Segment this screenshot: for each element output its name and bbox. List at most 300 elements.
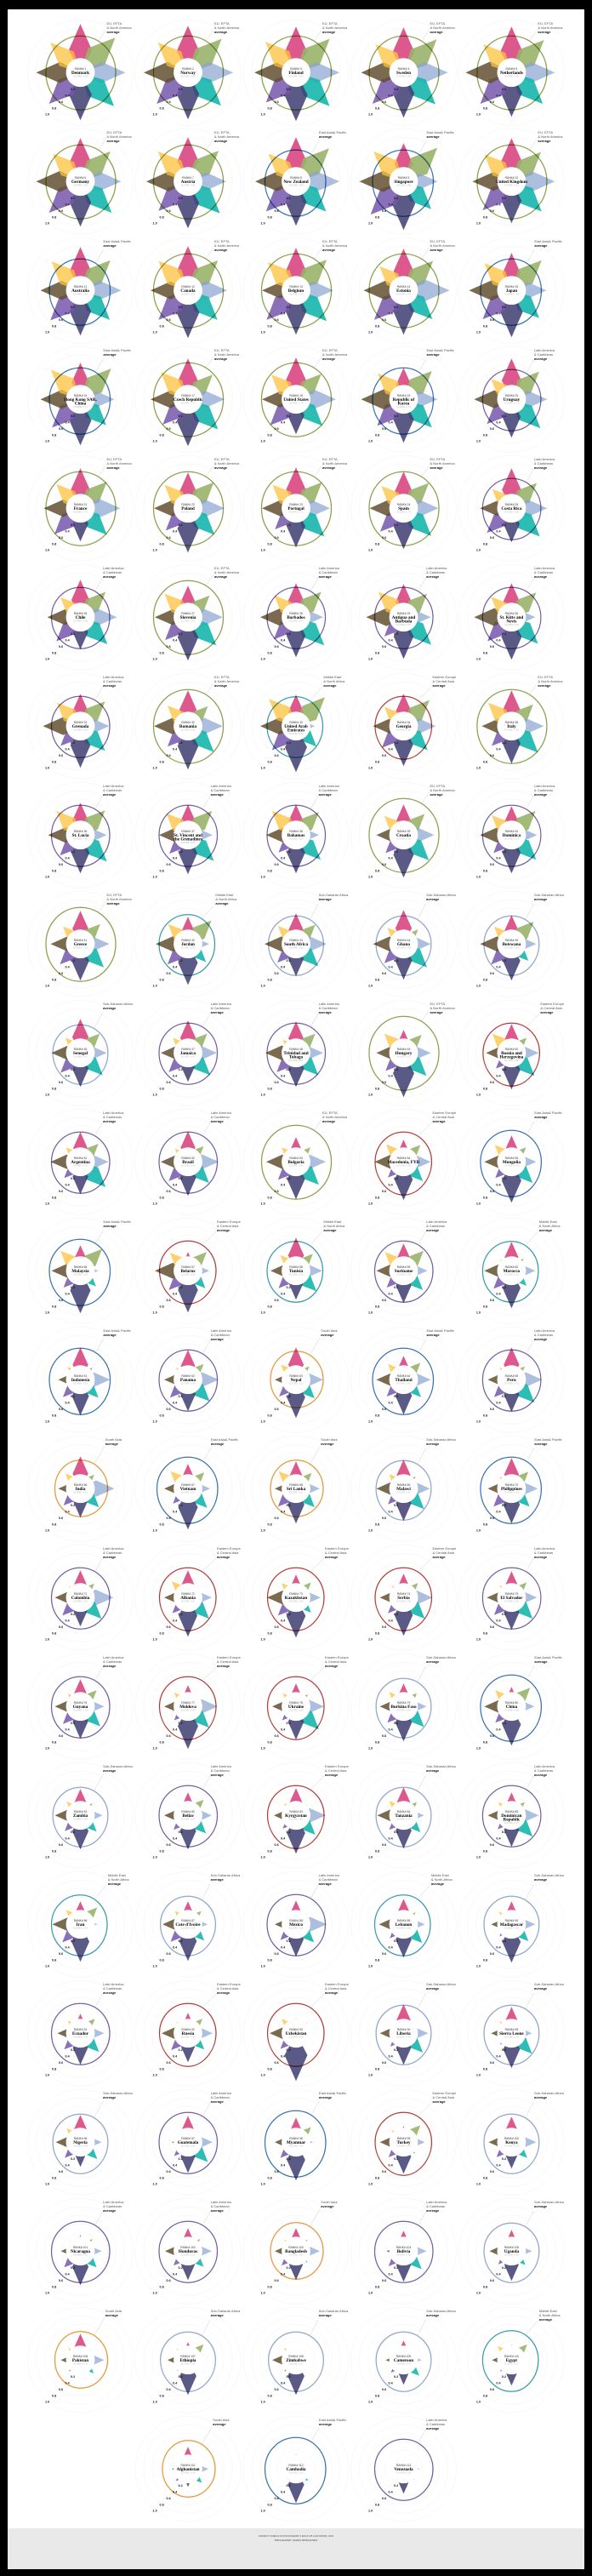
panel: South Africa — [243, 891, 349, 997]
region note: & North America — [538, 134, 563, 139]
ring — [477, 139, 547, 219]
ring — [267, 1014, 325, 1084]
ring — [376, 2320, 431, 2391]
rank: Hungary — [396, 1051, 413, 1056]
petals — [275, 1347, 323, 1418]
panel: Georgia — [350, 673, 457, 779]
petals — [378, 1787, 424, 1848]
petals — [266, 804, 327, 873]
panel: Ecuador — [27, 1980, 133, 2086]
petals — [474, 583, 544, 660]
petals — [373, 910, 433, 980]
rank: RANK# 86 — [74, 1919, 87, 1922]
rank: SCORE: 0.60 — [181, 946, 196, 950]
region note: Sub-Saharan Africa — [426, 2309, 457, 2313]
region note: East Asia& Pacific — [104, 348, 131, 352]
petals — [486, 1024, 540, 1089]
region note: average — [325, 1773, 339, 1777]
region note: EU, EFTA — [107, 457, 122, 461]
region note: average — [534, 466, 548, 470]
rank: Herzegovina — [499, 1054, 524, 1060]
petals — [376, 1356, 430, 1414]
region note: Sub-Saharan Africa — [103, 2091, 134, 2095]
ring — [161, 2320, 215, 2391]
rank: SCORE: 0.45 — [289, 2036, 304, 2039]
rank: Pakistan — [72, 2358, 88, 2363]
petals — [274, 1461, 320, 1523]
petals — [272, 1683, 324, 1739]
panel: Spain — [350, 455, 456, 561]
region note: average — [214, 466, 228, 470]
rank: SCORE: 0.51 — [181, 1491, 196, 1494]
panel: United Kingdom — [458, 129, 564, 234]
rank: RANK# 32 — [181, 721, 195, 724]
region note: & North America — [107, 134, 132, 139]
panel: Ghana — [350, 891, 457, 997]
region note: EU, EFTA — [430, 1002, 446, 1006]
petals — [386, 2340, 423, 2385]
region note: & North America — [322, 461, 348, 466]
rank: RANK# 23 — [289, 503, 303, 506]
ring — [265, 2428, 326, 2504]
region note: average — [214, 683, 228, 688]
rank: SCORE: 0.58 — [504, 946, 519, 950]
panel: Portugal — [243, 455, 349, 561]
rank: Panama — [180, 1378, 196, 1383]
ring — [265, 140, 326, 216]
petals — [376, 1029, 432, 1097]
region note: average — [432, 1555, 446, 1559]
petals — [51, 1132, 111, 1194]
region note: East Asia& Pacific — [427, 130, 454, 134]
region note: average — [539, 2317, 553, 2322]
region note: average — [430, 248, 443, 252]
rank: Kazakhstan — [285, 1596, 307, 1601]
region note: & Central Asia — [217, 1224, 239, 1228]
panel: Greece — [27, 891, 133, 997]
rank: RANK# 77 — [181, 1701, 195, 1705]
ring — [376, 1448, 431, 1520]
rank: SCORE: 0.56 — [504, 1059, 519, 1062]
region note: average — [534, 1659, 548, 1664]
region note: South Asia — [105, 2309, 122, 2313]
rank: SCORE: 0.86 — [504, 75, 519, 78]
region note: average — [105, 2313, 119, 2317]
region note: Latin America — [426, 566, 447, 570]
petals — [275, 2228, 320, 2280]
rank: RANK# 102 — [180, 2246, 196, 2249]
region note: average — [319, 2422, 333, 2426]
rank: St. Vincent and — [174, 833, 202, 838]
rank: Zimbabwe — [286, 2358, 307, 2363]
region note: Latin America — [103, 1982, 124, 1986]
rank: Uganda — [504, 2249, 519, 2254]
rank: Egypt — [506, 2358, 517, 2363]
panel: Antigua and Barbuda — [350, 564, 456, 670]
rank: SCORE: 0.66 — [73, 728, 88, 732]
rank: RANK# 112 — [288, 2464, 304, 2467]
region note: average — [211, 1119, 224, 1123]
rank: South Africa — [284, 942, 308, 947]
ring — [482, 578, 541, 648]
rank: SCORE: 0.45 — [181, 2036, 196, 2039]
petals — [164, 1685, 218, 1749]
rank: SCORE: 0.37 — [396, 2362, 411, 2366]
region note: average — [426, 1986, 440, 1991]
panel: Zimbabwe — [243, 2307, 349, 2413]
petals — [275, 1900, 327, 1956]
ring — [46, 901, 116, 981]
petals — [361, 27, 447, 117]
rank: Albania — [180, 1596, 196, 1601]
region note: average — [534, 243, 548, 248]
rank: RANK# 106 — [73, 2355, 88, 2358]
rank: Peru — [507, 1378, 516, 1383]
petals — [154, 690, 223, 769]
region note: East Asia& Pacific — [319, 130, 346, 134]
region note: average — [321, 1333, 334, 1337]
panel: St. Vincent and the Grenadines — [135, 782, 241, 888]
rank: Honduras — [179, 2249, 197, 2254]
petals — [259, 248, 334, 334]
rank: SCORE: 0.46 — [289, 1927, 304, 1930]
panel: Belgium — [243, 237, 349, 343]
rank: RANK# 83 — [289, 1810, 303, 1813]
rank: SCORE: 0.53 — [396, 1273, 411, 1277]
rank: RANK# 39 — [397, 830, 410, 833]
ring — [162, 2427, 215, 2497]
region note: average — [322, 357, 336, 361]
panel: Madagascar — [458, 1871, 564, 1977]
region note: average — [319, 897, 332, 901]
region note: average — [322, 1119, 336, 1123]
petals — [359, 140, 446, 230]
ring — [374, 2212, 433, 2282]
panel: Senegal — [27, 1000, 134, 1105]
rank: Turkey — [397, 2140, 411, 2145]
ring — [369, 1010, 439, 1090]
rank: RANK# 26 — [74, 612, 87, 615]
rank: RANK# 17 — [181, 394, 195, 397]
region note: average — [211, 2099, 224, 2104]
region note: EU, EFTA — [538, 130, 553, 134]
region note: & North Africa — [215, 897, 237, 901]
rank: RANK# 63 — [289, 1374, 303, 1378]
ring — [482, 1231, 538, 1302]
rank: RANK# 3 — [290, 67, 302, 71]
region note: EU, EFTA — [538, 675, 553, 679]
panel: Botswana — [458, 891, 564, 997]
rank: Tunisia — [289, 1269, 304, 1274]
rank: RANK# 96 — [74, 2137, 87, 2140]
panel: Italy — [458, 673, 564, 779]
region note: average — [103, 1768, 117, 1773]
region note: & Caribbean — [211, 1333, 230, 1337]
rank: RANK# 44 — [397, 939, 410, 942]
region note: Latin America — [211, 1764, 232, 1768]
panel: Nicaragua — [27, 2198, 133, 2304]
rank: Greece — [74, 942, 88, 947]
region note: & Caribbean — [319, 1006, 338, 1010]
region note: EU, EFTA — [214, 566, 230, 570]
region note: average — [430, 466, 443, 470]
region note: Latin America — [211, 1328, 232, 1333]
petals — [162, 2013, 213, 2062]
rank: Malaysia — [71, 1269, 89, 1274]
ring — [262, 357, 332, 437]
region note: average — [107, 139, 120, 143]
region note: average — [432, 1119, 446, 1123]
rank: SCORE: 0.66 — [504, 623, 519, 626]
region note: average — [534, 1115, 548, 1119]
region note: Latin America — [211, 1111, 232, 1115]
rank: Colombia — [71, 1596, 90, 1601]
ring — [267, 1667, 324, 1739]
panel: Macedonia, FYR — [350, 1109, 457, 1214]
panel: Panama — [135, 1327, 241, 1432]
panel: Serbia — [350, 1545, 457, 1650]
rank: RANK# 104 — [396, 2246, 411, 2249]
ring — [54, 1447, 107, 1516]
rank: Spain — [398, 506, 409, 511]
rank: SCORE: 0.67 — [181, 620, 196, 623]
rank: Barbados — [287, 615, 305, 620]
panel: Nepal — [243, 1327, 349, 1432]
region note: & Central Asia — [432, 679, 455, 683]
region note: & Caribbean — [211, 2095, 230, 2099]
region note: Sub-Saharan Africa — [319, 2309, 349, 2313]
rank: RANK# 13 — [289, 285, 303, 288]
ring — [153, 139, 223, 219]
region note: Middle East — [215, 893, 234, 897]
region note: average — [426, 2426, 440, 2430]
region note: average — [534, 2095, 548, 2099]
panel: Morocco — [458, 1218, 564, 1323]
petals — [376, 1243, 428, 1303]
region note: East Asia& Pacific — [319, 2091, 346, 2095]
rank: SCORE: 0.83 — [73, 184, 88, 187]
ring — [262, 1119, 332, 1199]
panel: Suriname — [350, 1218, 456, 1323]
region note: & Caribbean — [319, 570, 338, 574]
panel: Hong Kong SAR, China — [27, 346, 133, 452]
region note: & North Africa — [539, 1224, 561, 1228]
rank: RANK# 64 — [397, 1374, 410, 1378]
rank: Emirates — [287, 728, 305, 733]
rank: Czech Republic — [174, 397, 203, 403]
rank: SCORE: 0.52 — [73, 1382, 88, 1385]
ring — [373, 358, 434, 434]
panel: New Zealand — [243, 129, 349, 234]
region note: average — [322, 466, 336, 470]
region note: average — [103, 2208, 117, 2213]
panel: Guatemala — [135, 2089, 241, 2195]
region note: average — [540, 1010, 554, 1014]
ring — [376, 904, 431, 975]
panel: United Arab Emirates — [243, 673, 349, 779]
region note: average — [217, 1664, 231, 1668]
ring — [374, 2430, 433, 2500]
region note: & North America — [214, 679, 240, 683]
region note: average — [325, 1991, 339, 1995]
region note: average — [211, 2208, 224, 2213]
rank: SCORE: 0.58 — [396, 946, 411, 950]
ring — [477, 683, 547, 763]
rank: SCORE: 0.54 — [504, 1164, 519, 1168]
region note: average — [217, 1991, 231, 1995]
region note: East Asia& Pacific — [104, 1328, 131, 1333]
ring — [267, 1885, 325, 1956]
region note: EU, EFTA — [430, 784, 446, 788]
rank: RANK# 89 — [397, 1919, 410, 1922]
region note: Latin America — [319, 566, 340, 570]
region note: average — [534, 357, 548, 361]
ring — [482, 1340, 541, 1411]
panel: Tanzania — [350, 1762, 457, 1868]
panel: Sierra Leone — [458, 1980, 564, 2086]
rank: SCORE: 0.47 — [396, 1818, 411, 1821]
region note: EU, EFTA — [322, 1111, 338, 1115]
ring — [267, 1231, 323, 1302]
region note: Latin America — [103, 1546, 124, 1551]
petals — [58, 1347, 111, 1415]
panel: Nigeria — [27, 2089, 134, 2195]
region note: & Central Asia — [432, 2095, 455, 2099]
region note: average — [534, 2204, 548, 2208]
rank: RANK# 93 — [289, 2028, 303, 2031]
region note: & Caribbean — [103, 1115, 122, 1119]
panel: Albania — [135, 1545, 242, 1650]
ring — [482, 1558, 541, 1629]
rank: SCORE: 0.50 — [396, 1600, 411, 1603]
rank: SCORE: 0.48 — [73, 1818, 88, 1821]
panel: Cambodia — [243, 2416, 349, 2522]
rank: El Salvador — [500, 1596, 523, 1601]
rank: Hong Kong SAR, — [64, 397, 97, 403]
rank: SCORE: 0.50 — [289, 1600, 304, 1603]
petals — [491, 2007, 537, 2068]
ring — [267, 1776, 324, 1848]
ring — [160, 1667, 216, 1739]
ring — [49, 1339, 111, 1414]
ring — [484, 1884, 539, 1956]
ring — [159, 1776, 218, 1847]
rank: Uzbekistan — [286, 2031, 307, 2036]
rank: SCORE: 0.38 — [181, 2362, 196, 2366]
region note: average — [319, 792, 332, 797]
region note: & North America — [430, 26, 455, 30]
panel: Mongolia — [458, 1109, 564, 1214]
ring — [373, 140, 434, 216]
panel: Austria — [135, 129, 241, 234]
panel: Tunisia — [243, 1218, 349, 1323]
petals — [487, 1792, 538, 1847]
rank: RANK# 58 — [289, 1265, 303, 1269]
rank: SCORE: 0.57 — [396, 1055, 411, 1059]
region note: average — [104, 1333, 117, 1337]
region note: average — [217, 1555, 231, 1559]
panel: Guyana — [27, 1654, 133, 1759]
region note: & Caribbean — [534, 788, 553, 792]
rank: Nepal — [291, 1378, 302, 1383]
rank: SCORE: 0.75 — [181, 402, 196, 405]
rank: SCORE: 0.40 — [396, 2253, 411, 2257]
region note: average — [322, 248, 336, 252]
region note: & Caribbean — [426, 1224, 445, 1228]
rank: Kyrgyzstan — [285, 1813, 307, 1819]
panel: Thailand — [350, 1327, 456, 1432]
region note: EU, EFTA — [107, 130, 122, 134]
ring — [482, 2321, 538, 2391]
ring — [262, 30, 332, 110]
rank: SCORE: 0.42 — [181, 2253, 196, 2257]
panel: Grenada — [27, 673, 133, 779]
panel: Uzbekistan — [243, 1980, 350, 2086]
panel: Sweden — [350, 20, 456, 125]
petals — [465, 26, 555, 117]
rank: Georgia — [396, 724, 412, 729]
rank: RANK# 42 — [181, 939, 195, 942]
region note: average — [108, 1882, 122, 1886]
rank: RANK# 87 — [181, 1919, 195, 1922]
rank: SCORE: 0.39 — [504, 2253, 519, 2257]
panel: Colombia — [27, 1545, 133, 1650]
region note: East Asia& Pacific — [104, 1219, 131, 1224]
rank: RANK# 99 — [397, 2137, 410, 2140]
region note: & North America — [430, 243, 455, 248]
rank: RANK# 95 — [505, 2028, 518, 2031]
region note: average — [427, 134, 440, 139]
rank: Bangladesh — [285, 2249, 307, 2254]
panel: Costa Rica — [458, 455, 564, 561]
rank: Ukraine — [288, 1705, 305, 1710]
region note: Middle East — [323, 675, 342, 679]
region note: average — [214, 357, 228, 361]
region note: & Central Asia — [217, 1659, 239, 1664]
rank: RANK# 81 — [74, 1810, 87, 1813]
panel: Burkina Faso — [350, 1654, 457, 1759]
rank: SCORE: 0.65 — [396, 728, 411, 732]
petals — [60, 2235, 102, 2285]
ring — [374, 578, 433, 648]
rank: SCORE: 0.49 — [73, 1709, 88, 1712]
petals — [270, 1237, 322, 1299]
region note: EU, EFTA — [322, 348, 338, 352]
petals — [48, 580, 117, 651]
ring — [482, 796, 541, 866]
rank: Belize — [182, 1813, 194, 1819]
panel: Indonesia — [27, 1327, 133, 1432]
region note: EU, EFTA — [214, 457, 230, 461]
rank: SCORE: 0.52 — [181, 1382, 196, 1385]
panel: Japan — [458, 237, 564, 343]
rank: RANK# 35 — [505, 721, 518, 724]
ring — [376, 1993, 431, 2065]
petals — [51, 911, 110, 980]
region note: Sub-Saharan Africa — [426, 1655, 457, 1659]
ring — [49, 358, 111, 434]
rank: Ghana — [397, 942, 410, 947]
petals — [164, 1570, 214, 1636]
petals — [398, 2465, 420, 2493]
ring — [159, 905, 214, 975]
panel: Dominica — [458, 782, 564, 888]
rank: SCORE: 0.71 — [181, 511, 196, 514]
rank: RANK# 92 — [181, 2028, 195, 2031]
petals — [159, 804, 220, 874]
region note: average — [217, 1228, 231, 1232]
rank: SCORE: 0.53 — [289, 1273, 304, 1277]
